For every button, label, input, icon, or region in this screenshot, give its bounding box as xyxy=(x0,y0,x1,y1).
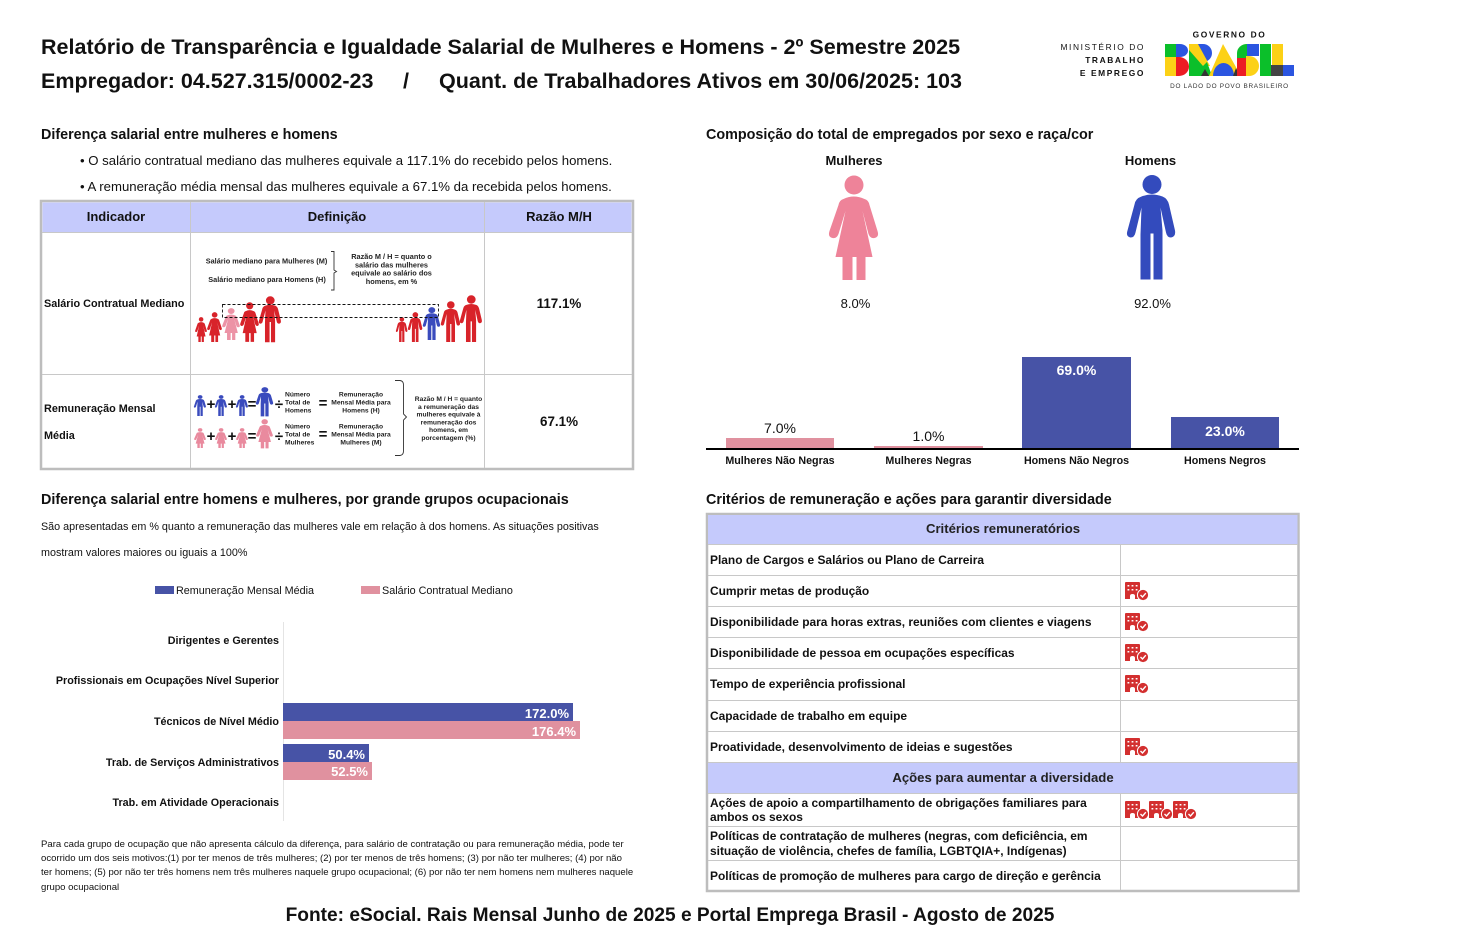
criteria rows: ambos os sexos xyxy=(710,810,803,824)
section header: critérios remuneratórios: Critérios remuneratórios xyxy=(926,521,1080,536)
diagram: salário contratual: Salário mediano para Mulheres (M) xyxy=(206,256,328,266)
diagram: remuneração mensal média: Razão M / H = quanto xyxy=(415,396,482,403)
chart description: mostram valores maiores ou iguais a 100% xyxy=(41,547,248,559)
title: Empregador: 04.527.315/0002-23 xyxy=(41,69,374,93)
column chart: sexo e raça/cor: Mulheres Negras xyxy=(885,455,972,467)
diagram: remuneração mensal média: Homens xyxy=(285,408,312,414)
legend xyxy=(155,585,513,597)
criteria rows: Proatividade, desenvolvimento de ideias e sugestões xyxy=(710,740,1013,754)
row label: remuneração mensal média xyxy=(44,403,156,442)
pictogram: homens: 92.0% xyxy=(1134,296,1171,311)
column chart: sexo e raça/cor: Homens Não Negros xyxy=(1024,455,1129,467)
pictogram: mulheres: Mulheres xyxy=(825,153,883,168)
column chart: sexo e raça/cor: Homens Negros xyxy=(1184,455,1266,467)
diagram: remuneração mensal média: Mensal Média para xyxy=(331,432,391,438)
diagram: remuneração mensal média: Homens (H) xyxy=(342,408,380,414)
diagram: remuneração mensal média: a remuneração das xyxy=(418,404,479,411)
criteria rows: Plano de Cargos e Salários ou Plano de Carreira xyxy=(710,553,984,567)
diagram: remuneração mensal média: Número xyxy=(285,392,310,398)
diagram: remuneração mensal média: Total de xyxy=(285,432,310,438)
diagram: remuneração mensal média: Total de xyxy=(285,400,310,406)
title: / xyxy=(403,69,409,93)
column chart: sexo e raça/cor: 1.0% xyxy=(913,428,944,444)
logo: Ministério do Trabalho e Emprego xyxy=(1060,42,1145,78)
bar chart: grupos ocupacionais: 52.5% xyxy=(331,764,368,779)
bar chart: grupos ocupacionais: 176.4% xyxy=(532,724,576,739)
column chart: sexo e raça/cor: 69.0% xyxy=(1057,362,1097,378)
diagram: salário contratual xyxy=(195,252,482,342)
criteria rows: situação de violência, chefes de família, LGBTQIA+, Indígenas) xyxy=(710,844,1067,858)
diagram: remuneração mensal média: + xyxy=(207,396,216,413)
chart description: São apresentadas em % quanto a remuneração das mulheres vale em relação à dos homens. As situações positivas xyxy=(41,521,599,533)
row label: remuneração mensal média: Média xyxy=(44,430,76,442)
value 67.1%: 67.1% xyxy=(540,414,578,429)
table header: Razão M/H xyxy=(526,209,592,224)
diagram: salário contratual: salário das mulheres xyxy=(355,260,428,270)
bar chart: grupos ocupacionais: Trab. de Serviços Administrativos xyxy=(106,757,279,769)
bar chart: grupos ocupacionais: Profissionais em Ocupações Nível Superior xyxy=(56,675,280,687)
panel: tabela de indicadores xyxy=(41,201,633,469)
title xyxy=(41,35,962,93)
column chart: sexo e raça/cor: 7.0% xyxy=(764,420,796,436)
bar chart: grupos ocupacionais: Técnicos de Nível Médio xyxy=(154,716,279,728)
source: Fonte: eSocial. Rais Mensal Junho de 2025 e Portal Emprega Brasil - Agosto de 2025 xyxy=(286,905,1055,926)
footnote: ocorrido um dos seis motivos:(1) por ter menos de três mulheres; (2) por ter menos de três homens; (3) por não ter mulheres; (4) por não xyxy=(41,853,622,864)
footnote: Para cada grupo de ocupação que não apresenta cálculo da diferença, para salário de contratação ou para remuneração média, pode ter xyxy=(41,839,624,850)
bar chart: grupos ocupacionais: Dirigentes e Gerentes xyxy=(168,635,279,647)
row label: salário contratual mediano: Salário Contratual Mediano xyxy=(44,298,185,310)
diagram: remuneração mensal média: + xyxy=(228,396,237,413)
bar chart: grupos ocupacionais: Trab. em Atividade Operacionais xyxy=(112,797,279,809)
diagram: remuneração mensal média: = xyxy=(319,426,328,443)
table header xyxy=(87,209,592,224)
pictogram: mulheres: 8.0% xyxy=(841,296,871,311)
heading: composição: Composição do total de empregados por sexo e raça/cor xyxy=(706,127,1094,143)
panel: critérios table xyxy=(707,514,1298,891)
heading: grupos ocupacionais: Diferença salarial entre homens e mulheres, por grande grupos ocupacionais xyxy=(41,492,569,508)
bar chart: grupos ocupacionais xyxy=(56,622,580,821)
diagram: remuneração mensal média: Mensal Média para xyxy=(331,400,391,406)
criteria rows: Políticas de promoção de mulheres para cargo de direção e gerência xyxy=(710,869,1101,883)
diagram: remuneração mensal média: + xyxy=(228,428,237,445)
bullet text: • O salário contratual mediano das mulheres equivale a 117.1% do recebido pelos homens. xyxy=(80,153,612,168)
diagram: remuneração mensal média: homens, em xyxy=(429,427,468,434)
pictogram: homens: Homens xyxy=(1125,153,1176,168)
logo: Governo do Brasil: GOVERNO DO xyxy=(1193,30,1266,40)
logo: Ministério do Trabalho e Emprego: MINISTÉRIO DO xyxy=(1060,42,1145,52)
logo: Ministério do Trabalho e Emprego: TRABALHO xyxy=(1085,55,1145,65)
diagram: remuneração mensal média: + xyxy=(207,428,216,445)
pictogram: mulheres xyxy=(825,153,883,311)
legend: Salário Contratual Mediano xyxy=(382,585,513,597)
criteria rows xyxy=(710,553,1101,883)
criteria rows: Cumprir metas de produção xyxy=(710,584,869,598)
bar chart: grupos ocupacionais: 50.4% xyxy=(328,747,365,762)
diagram: remuneração mensal média: mulheres equivale à xyxy=(417,412,481,418)
logo: Ministério do Trabalho e Emprego: E EMPREGO xyxy=(1080,68,1145,78)
diagram: remuneração mensal média: Remuneração xyxy=(339,424,383,430)
diagram: remuneração mensal média: ÷ xyxy=(275,428,283,445)
diagram: remuneração mensal média: Mulheres xyxy=(285,440,315,446)
title: Relatório de Transparência e Igualdade Salarial de Mulheres e Homens - 2º Semestre 2025 xyxy=(41,35,960,59)
criteria rows: Tempo de experiência profissional xyxy=(710,677,905,691)
diagram: remuneração mensal média: porcentagem (%) xyxy=(421,435,476,442)
column chart: sexo e raça/cor xyxy=(706,357,1299,467)
section header: ações: Ações para aumentar a diversidade xyxy=(892,770,1114,785)
bar chart: grupos ocupacionais: 172.0% xyxy=(525,706,569,721)
heading: diferença salarial: Diferença salarial entre mulheres e homens xyxy=(41,127,338,143)
bullet text xyxy=(80,153,612,194)
diagram: remuneração mensal média: ÷ xyxy=(275,396,283,413)
diagram: remuneração mensal média: Mulheres (M) xyxy=(340,440,382,446)
diagram: remuneração mensal média: Número xyxy=(285,424,310,430)
diagram: salário contratual: homens, em % xyxy=(366,277,418,286)
row label: remuneração mensal média: Remuneração Mensal xyxy=(44,403,156,415)
criteria rows: Capacidade de trabalho em equipe xyxy=(710,709,907,723)
diagram: salário contratual: Razão M / H = quanto o xyxy=(351,252,432,261)
diagram: remuneração mensal média: = xyxy=(248,396,257,413)
diagram: remuneração mensal média xyxy=(194,380,482,456)
criteria rows: Ações de apoio a compartilhamento de obrigações familiares para xyxy=(710,796,1087,810)
diagram: salário contratual: equivale ao salário dos xyxy=(351,268,432,278)
column chart: sexo e raça/cor: 23.0% xyxy=(1205,423,1245,439)
diagram: remuneração mensal média: = xyxy=(248,428,257,445)
diagram: remuneração mensal média: remuneração dos xyxy=(421,420,477,426)
value 117.1%: 117.1% xyxy=(537,296,581,311)
column chart: sexo e raça/cor: Mulheres Não Negras xyxy=(725,455,835,467)
bullet text: • A remuneração média mensal das mulheres equivale a 67.1% da recebida pelos homens. xyxy=(80,179,612,194)
logo: Governo do Brasil: DO LADO DO POVO BRASILEIRO xyxy=(1170,83,1289,90)
table header: Definição xyxy=(308,209,366,224)
heading: critérios: Critérios de remuneração e ações para garantir diversidade xyxy=(706,492,1112,508)
chart description xyxy=(41,521,599,559)
footnote xyxy=(41,839,633,893)
diagram: remuneração mensal média: = xyxy=(319,395,328,412)
logo: Governo do Brasil xyxy=(1165,30,1294,90)
criteria rows: Políticas de contratação de mulheres (negras, com deficiência, em xyxy=(710,829,1088,843)
diagram: remuneração mensal média: Remuneração xyxy=(339,392,383,398)
criteria rows: Disponibilidade para horas extras, reuniões com clientes e viagens xyxy=(710,615,1092,629)
legend: Remuneração Mensal Média xyxy=(176,585,314,597)
footnote: ter homens; (5) por não ter três homens nem três mulheres naquele grupo ocupacional; (6) por não ter nem homens nem mulheres naquele xyxy=(41,867,633,878)
pictogram: homens xyxy=(1125,153,1176,311)
icons: building with check xyxy=(1125,582,1197,820)
diagram: salário contratual: Salário mediano para Homens (H) xyxy=(208,275,326,284)
footnote: grupo ocupacional xyxy=(41,882,119,893)
criteria rows: Disponibilidade de pessoa em ocupações específicas xyxy=(710,646,1015,660)
title: Quant. de Trabalhadores Ativos em 30/06/2025: 103 xyxy=(439,69,962,93)
table header: Indicador xyxy=(87,209,145,224)
